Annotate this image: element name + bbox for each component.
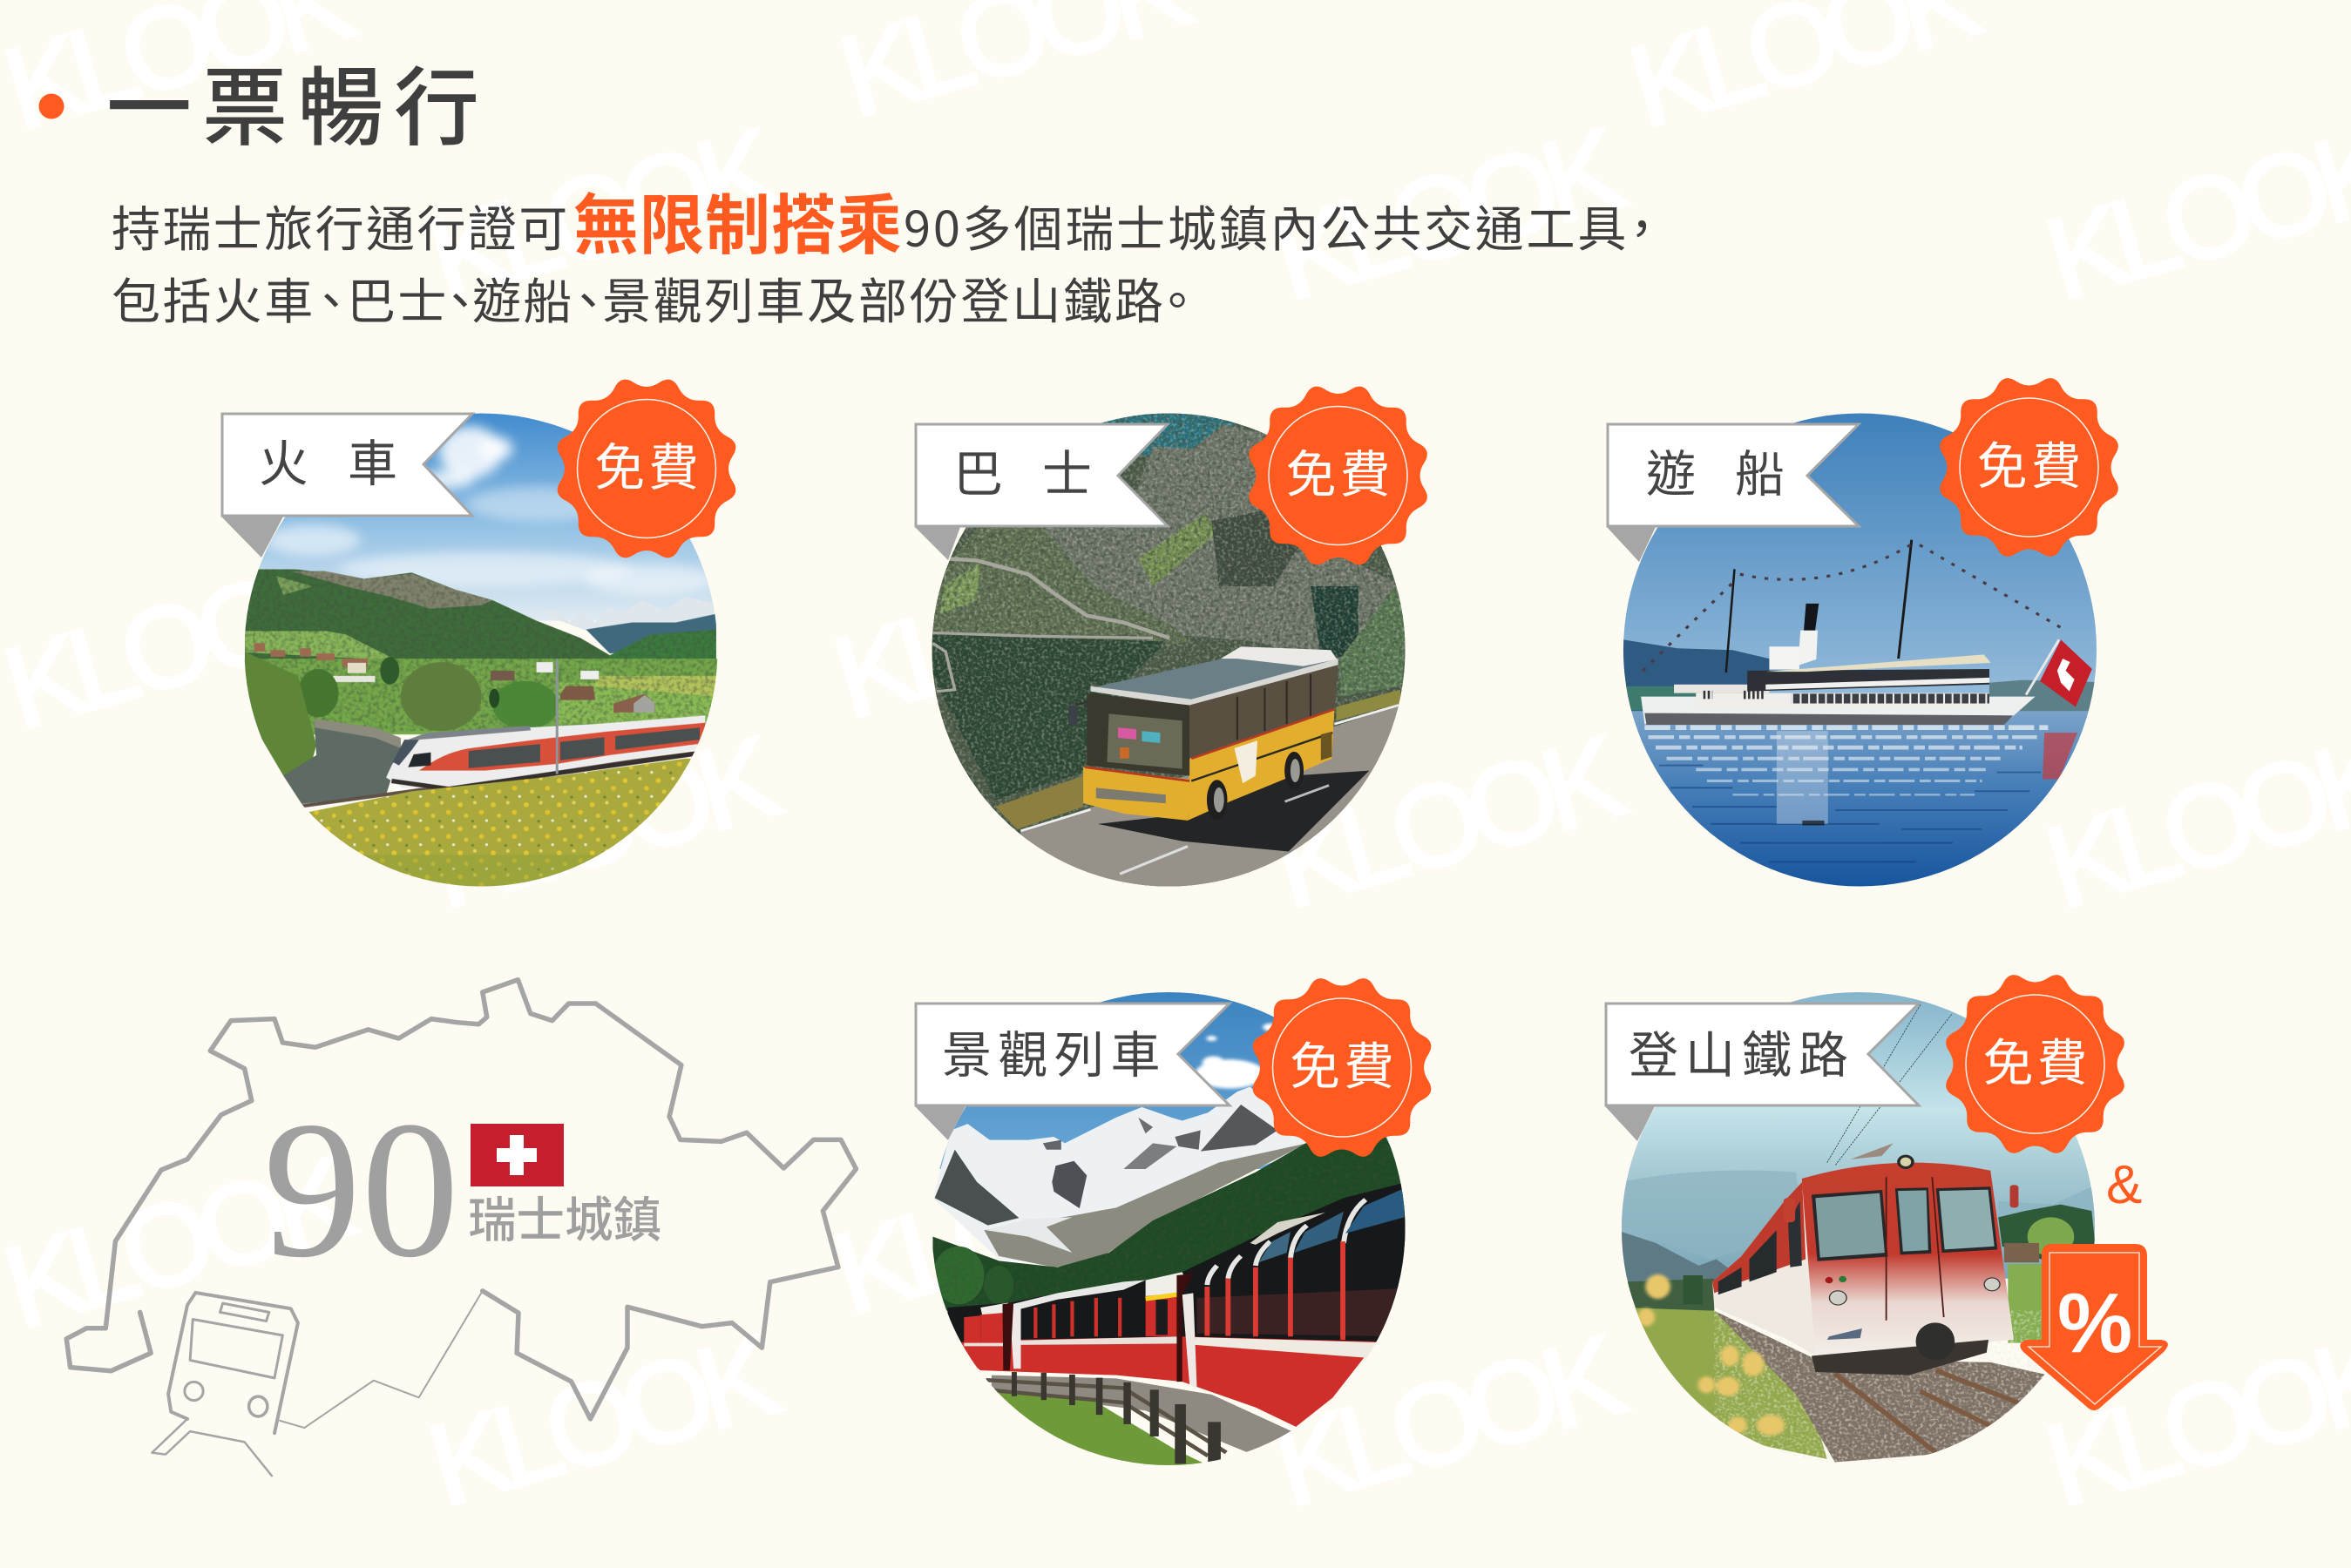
title: 一票暢行 [106, 39, 490, 163]
badge: free [1940, 378, 2118, 557]
intro line 2: 包括火車 [112, 263, 315, 334]
ribbon label [1606, 1004, 1919, 1105]
ribbon label [222, 414, 472, 516]
badge: free: 免費 [1976, 425, 2085, 498]
intro line 2: 、 [307, 263, 357, 334]
watermark pattern: KLOOK [0, 1132, 367, 1352]
label text: 巴士 [953, 435, 1131, 506]
badge: free [1249, 387, 1427, 564]
ribbon label [916, 1004, 1230, 1105]
panel: bus [915, 387, 1439, 917]
intro line 1: 無限制搭乘 [573, 172, 903, 267]
ampersand: & [2106, 1155, 2142, 1215]
icon: sketched train [152, 1293, 298, 1476]
ribbon label [1608, 424, 1859, 526]
intro text [112, 172, 1668, 334]
badge: free: 免費 [594, 427, 702, 500]
watermark pattern: KLOOK [1261, 712, 1636, 932]
panel: mountain railway [1605, 975, 2168, 1463]
watermark pattern: KLOOK [821, 1119, 1196, 1339]
photo: red and white cog railway [1617, 989, 2107, 1463]
watermark pattern: KLOOK [416, 712, 791, 932]
ribbon tail [1607, 527, 1656, 562]
intro line 2: 巴士 [347, 263, 449, 334]
label text: 遊船 [1646, 435, 1824, 506]
number 90: 90 [263, 1080, 459, 1298]
photo: paddle steamer on lake [1619, 407, 2103, 894]
badge: free: 免費 [1983, 1023, 2091, 1096]
badge: free: 免費 [1290, 1026, 1398, 1099]
badge: free [1253, 978, 1431, 1157]
intro line 2: 、 [436, 263, 486, 334]
ribbon tail [1605, 1106, 1655, 1141]
panel: train [221, 380, 742, 917]
intro line 2: 遊船 [472, 263, 574, 334]
intro line 2: 、 [564, 263, 614, 334]
photo: train in valley [244, 413, 718, 887]
icon: discount arrow: % [2057, 1275, 2132, 1370]
photo: panoramic red train [925, 989, 1439, 1472]
icon: Swiss flag [471, 1124, 564, 1186]
intro line 1: ， [1617, 191, 1668, 261]
map outline of Switzerland [66, 980, 856, 1428]
panel: 90 towns map [66, 980, 856, 1476]
intro line 1: 90多個瑞士城鎮內公共交通工具 [904, 191, 1629, 261]
label text: 登山鐵路 [1629, 1016, 1855, 1087]
watermark pattern: KLOOK [0, 533, 367, 754]
panel: scenic train [915, 978, 1439, 1472]
watermark pattern: KLOOK [821, 522, 1196, 742]
towns label: 瑞士城鎮 [468, 1181, 661, 1251]
watermark pattern: KLOOK [1261, 1310, 1636, 1531]
icon: discount arrow [2020, 1244, 2168, 1410]
watermark pattern: KLOOK [1261, 104, 1636, 324]
badge: free [1946, 975, 2124, 1153]
label text: 景觀列車 [942, 1016, 1167, 1087]
badge: free [558, 380, 735, 558]
photo: postbus on mountain road [932, 413, 1405, 887]
watermark pattern: KLOOK [416, 1310, 791, 1531]
intro line 1: 持瑞士旅行通行證可 [112, 191, 570, 261]
label text: 火車 [259, 424, 437, 496]
intro line 2: 景觀列車及部份登山鐵路 [602, 263, 1166, 334]
watermark pattern: KLOOK [1616, 533, 1992, 754]
ribbon label [916, 424, 1168, 526]
ribbon tail [915, 1106, 965, 1140]
ribbon tail [915, 527, 960, 560]
icon: orange bullet [38, 94, 64, 118]
watermark pattern: KLOOK [1616, 1132, 1992, 1352]
ribbon tail [221, 517, 283, 558]
panel: ship [1607, 378, 2118, 894]
watermark pattern: KLOOK [416, 104, 791, 324]
intro line 2: 。 [1153, 263, 1203, 334]
badge: free: 免費 [1286, 434, 1394, 507]
